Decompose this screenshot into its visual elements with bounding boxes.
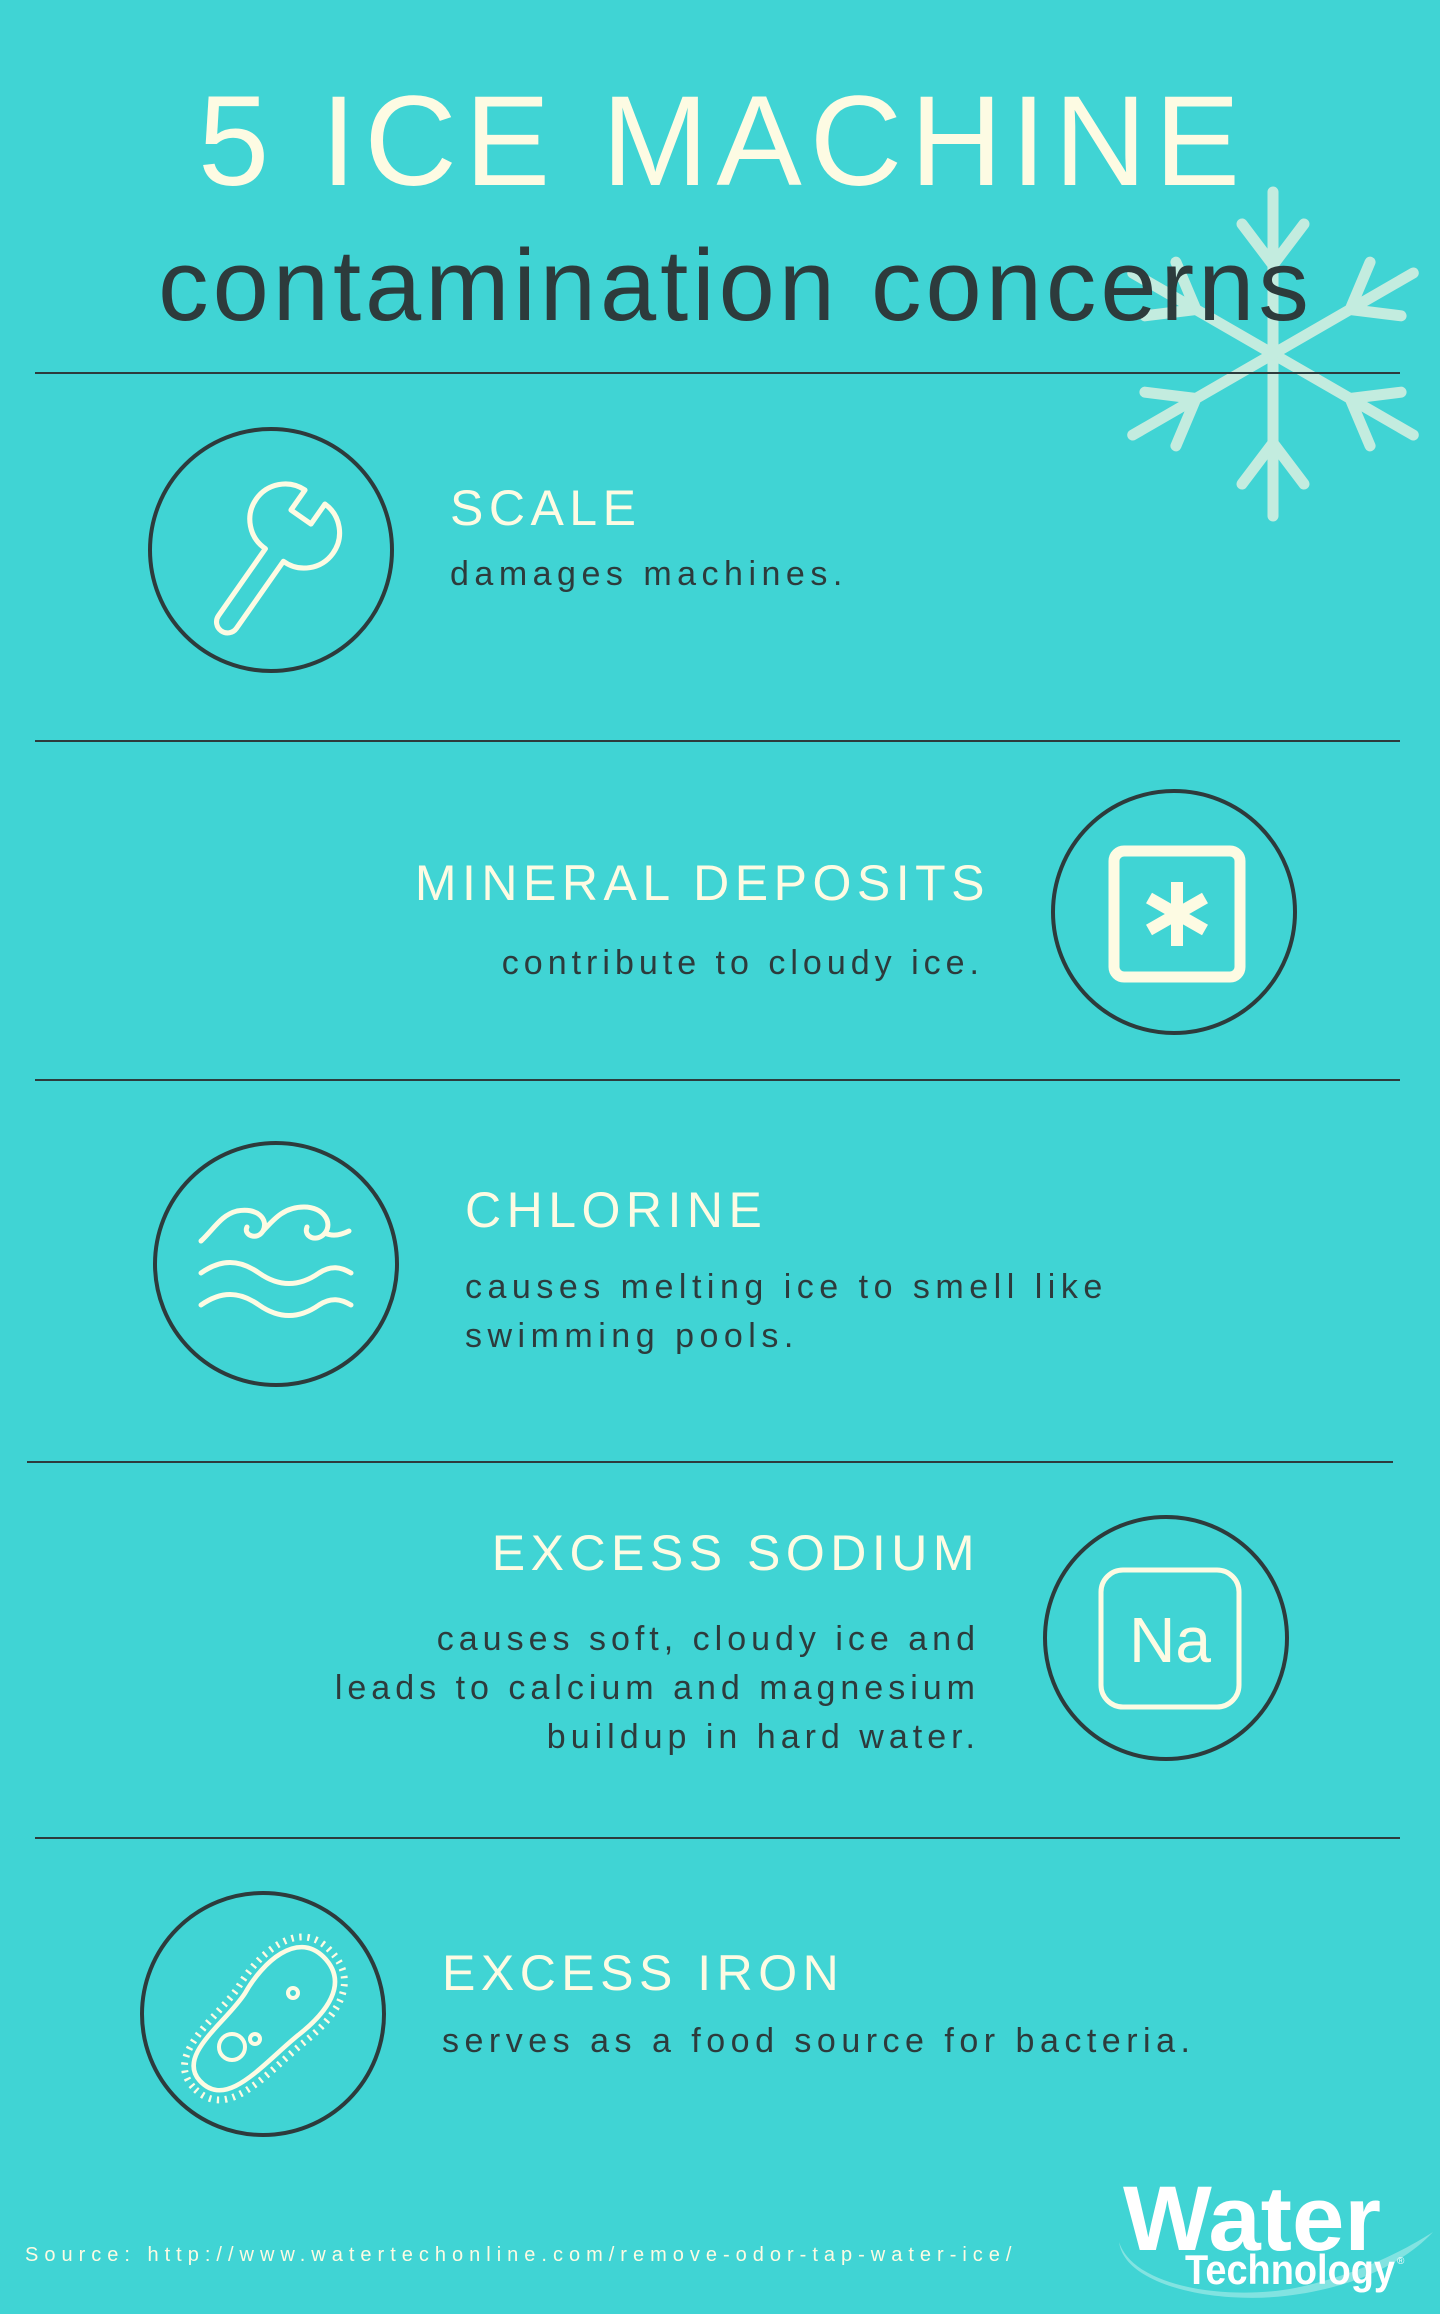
subtitle: contamination concerns (158, 230, 1313, 342)
text: excess iron: serves as a food source for bacteria. (442, 2022, 1195, 2060)
icon: bacterium (140, 1891, 386, 2137)
logo: Water Technology: ® (1397, 2256, 1405, 2267)
snowflake decoration (1127, 186, 1419, 522)
panel: excess sodium (335, 1515, 1289, 1761)
text: chlorine: causes melting ice to smell like (465, 1268, 1108, 1306)
logo: Water Technology: Technology (1185, 2246, 1396, 2293)
icon: Na: Na (1129, 1604, 1211, 1676)
heading: scale: SCALE (450, 480, 641, 536)
text: excess sodium: causes soft, cloudy ice and (437, 1620, 980, 1658)
heading: chlorine: CHLORINE (465, 1182, 767, 1238)
text: chlorine: swimming pools. (465, 1317, 799, 1355)
text: excess sodium: buildup in hard water. (547, 1718, 980, 1756)
text: excess sodium (335, 1620, 980, 1756)
text: mineral deposits: contribute to cloudy ice. (502, 944, 984, 982)
panel: chlorine (153, 1141, 1108, 1387)
source text: Source: http://www.watertechonline.com/remove-odor-tap-water-ice/ (25, 2244, 1017, 2266)
heading: mineral deposits: MINERAL DEPOSITS (415, 855, 990, 911)
title: 5 ICE MACHINE (198, 70, 1248, 213)
logo: Water Technology: Water (1123, 2170, 1381, 2270)
text: scale: damages machines. (450, 555, 848, 593)
icon: wrench (148, 427, 394, 673)
heading: excess sodium: EXCESS SODIUM (492, 1525, 980, 1581)
panel: mineral deposits (415, 789, 1297, 1035)
icon: waves (153, 1141, 399, 1387)
icon: frost square (1051, 789, 1297, 1035)
panel: excess iron (140, 1891, 1195, 2137)
logo: Water Technology (1119, 2170, 1433, 2298)
panel: scale (148, 427, 848, 673)
text: excess sodium: leads to calcium and magnesium (335, 1669, 980, 1707)
heading: excess iron: EXCESS IRON (442, 1945, 844, 2001)
text: chlorine (465, 1268, 1108, 1355)
icon: Na (1043, 1515, 1289, 1761)
